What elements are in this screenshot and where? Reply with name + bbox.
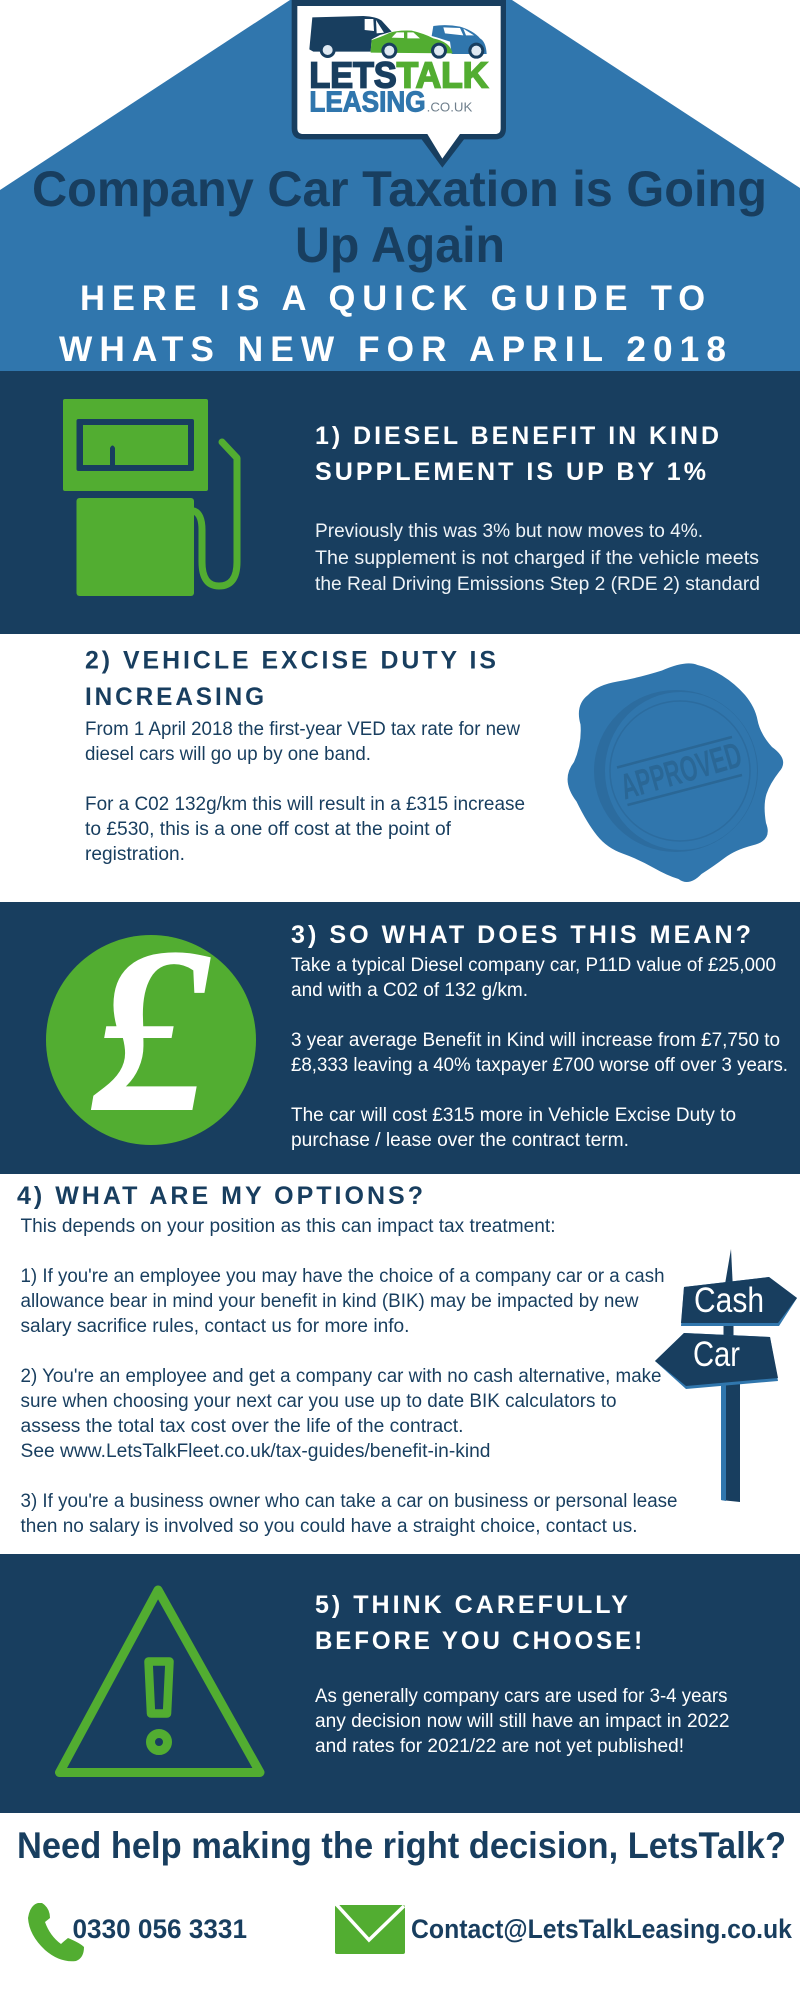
text: section 4 body: This depends on your position as this can impact tax treatment: [20, 1216, 556, 1237]
text: section 4 body [20, 1216, 678, 1537]
text: section 4 body: sure when choosing your next car you use up to date BIK calculators to [20, 1391, 616, 1412]
panel: think carefully [0, 1554, 800, 1813]
text: section 4 body: assess the total tax cost over the life of the contract. [20, 1416, 464, 1437]
heading: section 5: 5) THINK CAREFULLY [315, 1591, 631, 1619]
panel: what does this mean [0, 899, 800, 1174]
text: section 4 body: salary sacrifice rules, contact us for more info. [20, 1316, 409, 1337]
text: section 2 body: to £530, this is a one off cost at the point of [85, 819, 452, 840]
subtitle: WHATS NEW FOR APRIL 2018 [59, 330, 733, 369]
icon: signpost cash or car: Car [693, 1335, 740, 1374]
title: Up Again [295, 217, 505, 273]
logo wordmark [309, 54, 488, 118]
icon: envelope [335, 1904, 405, 1954]
text: section 2 body: diesel cars will go up by one band. [85, 744, 371, 765]
heading: section 2: 2) VEHICLE EXCISE DUTY IS [85, 646, 499, 674]
text: section 5 body: and rates for 2021/22 are not yet published! [315, 1736, 684, 1757]
text: section 1 body [315, 521, 760, 595]
panel: vehicle excise duty [0, 634, 800, 902]
panel: contact footer [17, 1825, 793, 1961]
panel: diesel benefit in kind [0, 371, 800, 634]
heading: section 5 [315, 1591, 645, 1655]
text: section 4 body: 1) If you're an employee you may have the choice of a company car or a cash [20, 1266, 664, 1287]
heading: section 4: 4) WHAT ARE MY OPTIONS? [17, 1182, 426, 1210]
heading: section 1: SUPPLEMENT IS UP BY 1% [315, 458, 709, 486]
text: section 3 body: Take a typical Diesel company car, P11D value of £25,000 [291, 955, 776, 976]
subtitle [59, 279, 733, 369]
icon: approved wax seal [568, 663, 783, 882]
text: section 1 body: Previously this was 3% but now moves to 4%. [315, 521, 703, 542]
text: phone number: 0330 056 3331 [72, 1914, 247, 1944]
icon: signpost cash or car: Cash [694, 1281, 764, 1320]
header panel [0, 0, 800, 371]
subtitle: HERE IS A QUICK GUIDE TO [80, 279, 712, 318]
logo wordmark: LETS [309, 54, 397, 95]
panel: what are my options [0, 1174, 800, 1554]
text: section 5 body: any decision now will still have an impact in 2022 [315, 1711, 730, 1732]
heading: section 2 [85, 646, 499, 711]
icon: warning triangle [60, 1590, 260, 1772]
icon: phone [28, 1903, 84, 1961]
icon: pound coin [46, 899, 256, 1162]
text: section 4 body: 3) If you're a business owner who can take a car on business or personal lease [20, 1491, 678, 1512]
icon: signpost cash or car [655, 1249, 797, 1502]
text: section 1 body: The supplement is not charged if the vehicle meets [315, 548, 759, 569]
logo vehicles [309, 16, 487, 59]
title: Company Car Taxation is Going [32, 161, 767, 217]
text: section 3 body: £8,333 leaving a 40% taxpayer £700 worse off over 3 years. [291, 1055, 788, 1076]
text: section 2 body: From 1 April 2018 the first-year VED tax rate for new [85, 719, 520, 740]
logo wordmark: .CO.UK [427, 99, 472, 114]
text: section 2 body: registration. [85, 844, 185, 865]
text: section 5 body [315, 1686, 730, 1757]
title [32, 161, 767, 273]
text: section 3 body: 3 year average Benefit in Kind will increase from £7,750 to [291, 1030, 780, 1051]
text: section 3 body: purchase / lease over the contract term. [291, 1130, 629, 1151]
text: section 3 body: and with a C02 of 132 g/km. [291, 980, 528, 1001]
text: section 4 body: allowance bear in mind your benefit in kind (BIK) may be impacted by new [20, 1291, 639, 1312]
text: section 4 body: 2) You're an employee and get a company car with no cash alternative, make [20, 1366, 662, 1387]
text: section 5 body: As generally company cars are used for 3-4 years [315, 1686, 728, 1707]
logo wordmark: TALK [397, 54, 488, 95]
text: section 2 body [85, 719, 525, 865]
logo speech bubble [292, 0, 506, 168]
text: section 4 body: then no salary is involved so you could have a straight choice, contact us. [20, 1516, 638, 1537]
text: section 1 body: the Real Driving Emissions Step 2 (RDE 2) standard [315, 574, 760, 595]
text: section 2 body: For a C02 132g/km this will result in a £315 increase [85, 794, 525, 815]
heading: section 1 [315, 422, 722, 486]
text: section 4 body: See www.LetsTalkFleet.co.uk/tax-guides/benefit-in-kind [20, 1441, 490, 1462]
heading: section 1: 1) DIESEL BENEFIT IN KIND [315, 422, 722, 450]
icon: fuel pump [63, 399, 237, 596]
heading: section 3: 3) SO WHAT DOES THIS MEAN? [291, 921, 754, 949]
text: section 3 body: The car will cost £315 more in Vehicle Excise Duty to [291, 1105, 736, 1126]
text: section 3 body [291, 955, 788, 1151]
icon: pound coin: £ [90, 899, 212, 1162]
logo wordmark: LEASING [309, 86, 426, 118]
heading: section 2: INCREASING [85, 683, 267, 711]
heading: section 5: BEFORE YOU CHOOSE! [315, 1627, 645, 1655]
